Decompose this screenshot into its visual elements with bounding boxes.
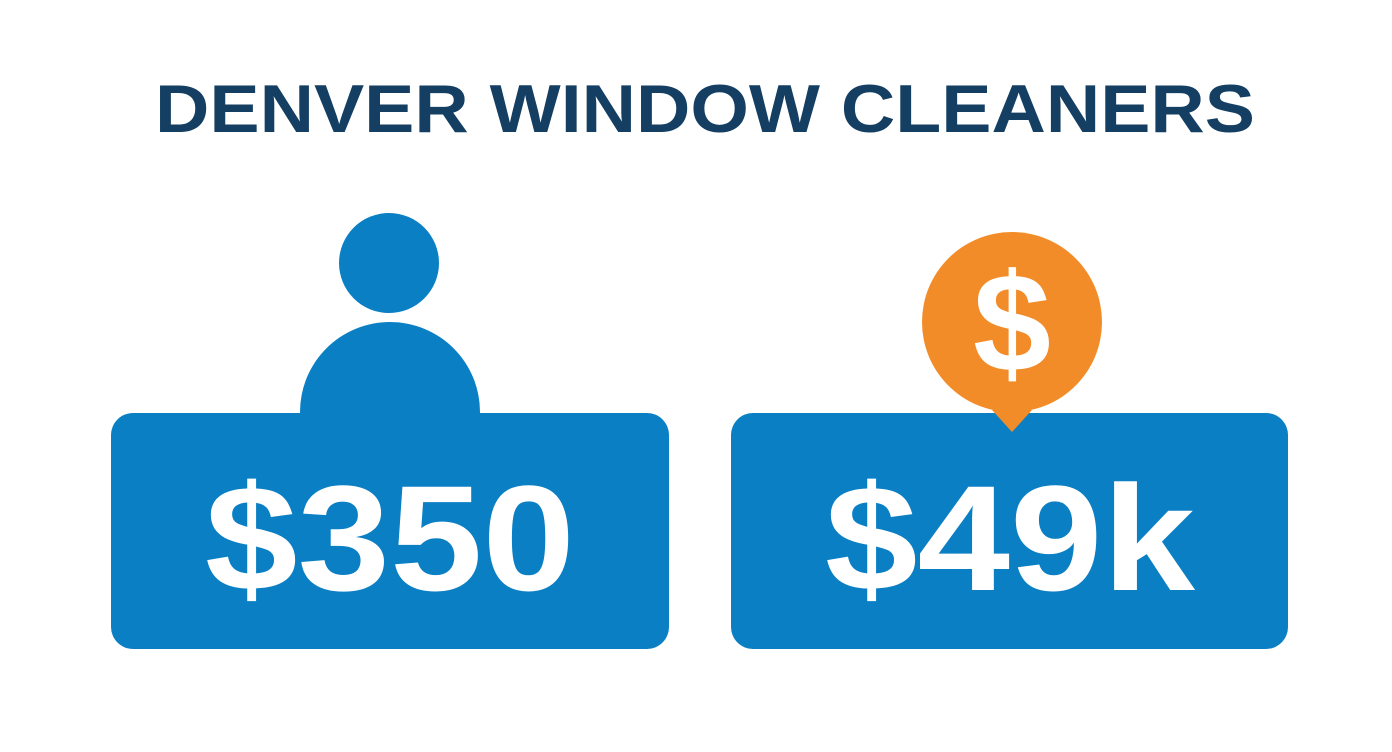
value left: $350 xyxy=(205,454,575,622)
icon: person xyxy=(300,213,480,420)
icon: dollar pin xyxy=(922,232,1102,432)
icon: dollar pin: $ xyxy=(973,244,1051,401)
value right: $49k xyxy=(825,454,1196,622)
title: DENVER WINDOW CLEANERS xyxy=(155,71,1255,147)
panel: left price xyxy=(111,213,669,649)
panel: right salary xyxy=(731,232,1288,649)
box right xyxy=(731,413,1288,649)
box left xyxy=(111,413,669,649)
